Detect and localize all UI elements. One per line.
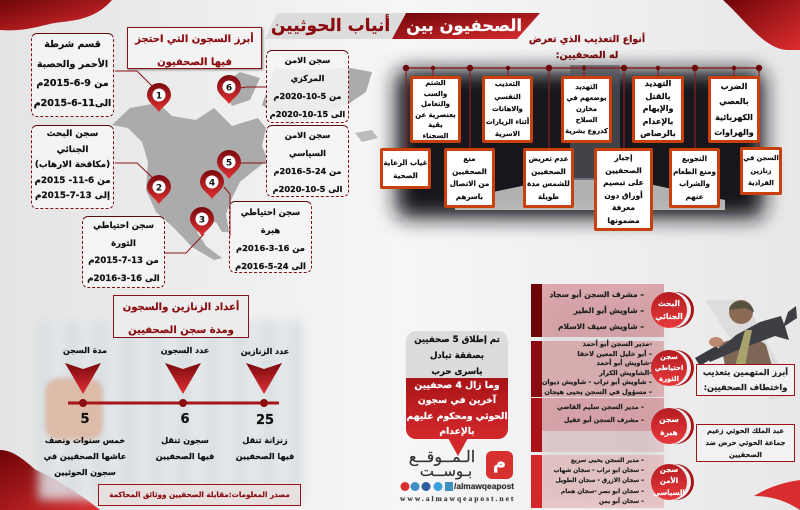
logo [409, 447, 513, 480]
torture: insults: السجناء [423, 132, 448, 140]
torture: death threats: بالإعدام [643, 117, 673, 126]
row: habra reserve [531, 398, 694, 452]
panel: prison 4: من 16-3-2016م [236, 243, 305, 253]
panel: prison 3: من 13-7-2015م [88, 256, 159, 266]
row: habra reserve: سجن [659, 415, 679, 424]
panel: prison 4: هبرة [261, 225, 280, 235]
illustration: armed militant [695, 300, 797, 364]
row: revolution reserve: سجن [660, 352, 678, 360]
label: Houthi leader: جماعة الحوثي حرض ضد [705, 439, 786, 447]
panel: prison 1: الى11-6-2015م [34, 98, 111, 108]
label: Houthi leader: عبد الملك الحوثي زعيم [707, 427, 784, 435]
torture: human shields: التهديد [575, 83, 598, 91]
torture: beating [708, 76, 760, 143]
column: prisons count: 6 [180, 412, 190, 427]
row: revolution reserve: -الشاويش الكرار [599, 369, 652, 377]
hand photo [45, 378, 103, 440]
panel: prison 6: الى 15-10-2020م [270, 109, 345, 119]
torture: solitary cells: زنازين [751, 167, 771, 175]
row: criminal investigation: الجنائي [655, 312, 683, 321]
torture: insults: الشتم [425, 79, 446, 87]
row: revolution reserve: – أبو خليل المعين لاحقا [577, 350, 652, 358]
torture: death threats: بالقتل [645, 92, 671, 101]
label: Houthi leader [696, 424, 795, 462]
row: criminal investigation: – مشرف السجن أبو سجاد [549, 290, 644, 299]
torture: forced signing: على تبصيم [603, 178, 644, 187]
torture: starvation: التجويع [682, 154, 707, 163]
row: political security: الأمن [660, 477, 678, 485]
callout: released journalists [406, 331, 508, 456]
panel: prison 4 [229, 201, 312, 273]
row: political security: سجن [660, 466, 678, 474]
torture: insults: والسب [424, 90, 447, 98]
column: duration: خمس سنوات ونصف [45, 436, 125, 445]
torture panel backdrop and connectors [378, 52, 781, 236]
torture: insults: والتعامل [421, 100, 450, 108]
label: accused names: أبرز المتهمين بتعذيب [703, 367, 788, 377]
panel: prison 1: الأحمر والحصبة [37, 58, 108, 70]
torture: starvation: ومنع الطعام [673, 166, 716, 176]
torture: no sunlight: الصحفيين [531, 166, 566, 176]
torture: forced signing: مضمونها [607, 216, 640, 224]
panel: prison 5: السياسي [289, 148, 326, 158]
torture: psychological: الاسرية [495, 130, 520, 138]
heading: cells and prisons: أعداد الزنازين والسجون [123, 302, 239, 313]
timeline chart [65, 363, 282, 407]
panel: prison 4: الى 24-5-2016م [235, 261, 306, 271]
row: criminal investigation [531, 284, 694, 337]
column: prisons count: سجون تنقل [161, 436, 209, 445]
column: cells count: 25 [256, 413, 274, 428]
row: political security: – سجان الازرق - سجان الطويل [556, 478, 644, 484]
callout: released journalists: الحوثي ومحكوم عليهم [406, 411, 508, 422]
label: accused names [696, 364, 795, 396]
torture: no healthcare [380, 148, 431, 189]
torture: no family contact [444, 148, 495, 208]
source note: مصدر المعلومات:مقابلة الصحفيين ووثائق المحاكمة [109, 490, 290, 499]
heading: cells and prisons [113, 295, 249, 338]
panel: prison 2: إلى 13-7-2015م [35, 191, 110, 201]
map pins and connectors: 4 [209, 178, 215, 188]
panel: prison 1: من 9-6-2015م [36, 78, 109, 89]
source note [98, 484, 301, 506]
torture: insults: بعنصرية عن [415, 110, 456, 118]
torture: insults [410, 76, 461, 143]
column: prisons count: فيها الصحفيين [156, 452, 214, 461]
torture: no sunlight: للشمس مدة [527, 179, 570, 188]
bars photo background [38, 320, 303, 500]
torture: human shields: السلاح [576, 116, 597, 124]
torture: forced signing: إجبار [614, 153, 633, 162]
torture: psychological: أثناء الزيارات [486, 118, 529, 126]
torture: psychological: النفسي [494, 93, 521, 101]
column: duration: عاشها الصحفيين في [44, 452, 126, 461]
panel: prison 5: من 24-5-2016م [273, 166, 342, 176]
label: Houthi leader: الصحفيين [729, 451, 762, 459]
panel: prison 6: سجن الامن [285, 55, 330, 65]
column: cells count: زنزانة تنقل [242, 436, 288, 445]
panel: prison 6: من 5-10-2020م [273, 91, 342, 101]
heading: main prisons: فيها الصحفيون [157, 57, 232, 68]
row: revolution reserve: -مدير السجن أبو أحمد [583, 340, 652, 348]
panel: prison 3: الثورة [111, 239, 136, 249]
torture: death threats: التهديد [645, 79, 671, 88]
row: political security: – سجان ابو نصر -سجان همام [561, 489, 644, 495]
panel: prison 5: الى 5-10-2020م [273, 184, 342, 194]
column: duration: مدة السجن [63, 346, 107, 355]
column: prisons count: عدد السجون [161, 346, 209, 355]
heading: torture types: له الصحفيين: [556, 50, 618, 61]
torture: forced signing: معرفة [612, 203, 635, 212]
torture: no healthcare: غياب الرعاية [384, 158, 428, 166]
torture: no sunlight: طويلة [538, 192, 559, 200]
map pins and connectors: 5 [226, 158, 232, 168]
row: revolution reserve: الثورة [659, 374, 679, 382]
row: revolution reserve: احتياطي [655, 364, 683, 372]
website: www.almawqeapost.net [400, 494, 515, 503]
panel: prison 2: (مكافحة الارهاب) [35, 160, 110, 170]
social icons and handle [400, 481, 514, 491]
callout: released journalists: وما زال 4 صحفيين [414, 380, 500, 391]
torture: human shields: بوضعهم في [566, 94, 607, 102]
torture: death threats: بالرصاص [640, 129, 676, 138]
callout: released journalists: آخرين في سجون [418, 395, 496, 406]
torture: beating: الكهربائية [715, 112, 753, 122]
callout: released journalists: تم إطلاق 5 صحفيين [414, 335, 500, 345]
torture: no family contact: منع [463, 154, 476, 163]
panel: prison 5 [266, 125, 349, 197]
panel: prison 3 [82, 216, 165, 288]
torture: starvation [669, 148, 720, 208]
panel: prison 6: المركزي [291, 73, 324, 83]
title banner: أنياب الحوثيين [271, 16, 390, 36]
row: political security: السياسي [653, 489, 685, 497]
torture: death threats: والإيهام [643, 104, 673, 113]
torture: solitary cells: الفرادية [748, 179, 774, 187]
panel: prison 5: سجن الامن [285, 130, 330, 140]
row: revolution reserve: -شاويش أبو أحمد [596, 359, 652, 367]
social icons and handle: /almawqeapost [454, 481, 514, 491]
torture: psychological: والاهانات [492, 105, 523, 113]
panel: prison 1 [31, 33, 114, 117]
column: cells count [236, 347, 294, 462]
logo: بـوســت [420, 462, 472, 480]
row: revolution reserve: – شاويش أبو تراب - شاويش ديوان [542, 378, 652, 386]
heading: main prisons [127, 27, 262, 69]
column: prisons count [156, 346, 214, 462]
row: political security: – سجان أبو يمن [599, 499, 644, 505]
column: cells count: عدد الزنازين [241, 347, 289, 356]
panel: prison 1: قسم شرطة [44, 39, 101, 50]
torture: solitary cells: السجن في [743, 154, 779, 162]
panel: prison 2: سجن البحث [47, 129, 98, 139]
callout: released journalists: باسرى حرب [431, 367, 483, 377]
panel: prison 2: الجنائي [57, 144, 88, 154]
row: political security: – مدير السجن يحيى سريع [571, 458, 644, 464]
column: duration: 5 [80, 412, 90, 427]
callout: released journalists: بصفقة تبادل [430, 351, 484, 361]
row: habra reserve: – مشرف السجن أبو عقيل [564, 417, 644, 424]
torture: death threats [632, 76, 684, 143]
label: accused names: واختطاف الصحفيين: [704, 382, 787, 392]
title banner: الصحفيون بين [406, 16, 522, 35]
map pins and connectors: 1 [156, 92, 162, 102]
torture: no sunlight [523, 148, 574, 208]
heading: cells and prisons: ومدة سجن الصحفيين [128, 325, 234, 336]
row: criminal investigation: – شاويش سيف الاسلام [558, 322, 644, 331]
torture: human shields: كدروع بشرية [565, 127, 608, 135]
map pins and connectors: 6 [226, 84, 232, 94]
heading: torture types [529, 32, 645, 61]
torture: human shields [561, 76, 612, 143]
heading: torture types: أنواع التعذيب الذي تعرض [529, 34, 645, 45]
row: criminal investigation: – شاويش أبو الطير [574, 306, 644, 315]
title banner [265, 13, 540, 39]
torture: beating: بالعصي [719, 97, 749, 106]
panel: prison 2: من 6-11- 2015م [34, 176, 111, 186]
torture: no family contact: من الاتصال [450, 179, 489, 188]
torture: no healthcare: الصحية [393, 170, 418, 180]
torture: psychological: التعذيب [495, 80, 520, 88]
accused list backdrop [540, 300, 660, 500]
map pins and connectors: 3 [199, 216, 205, 226]
panel: prison 6 [266, 50, 349, 123]
panel: prison 2 [31, 125, 114, 209]
torture: forced signing [594, 148, 653, 231]
torture: forced signing: الصحفيين [605, 166, 642, 174]
panel: prison 3: سجن احتياطي [93, 221, 154, 231]
map pins and connectors: 2 [156, 184, 162, 194]
row: revolution reserve: – مسؤول في السجن يحيى هيجان [544, 388, 652, 396]
torture: solitary cells [740, 147, 782, 195]
row: revolution reserve [531, 340, 694, 397]
callout: released journalists: بالإعدام [439, 426, 475, 437]
panel: prison 3: الى 16-3-2016م [87, 274, 160, 284]
torture: no sunlight: عدم تعريض [528, 154, 569, 163]
torture: insults: بقية [428, 121, 443, 129]
torture: no family contact: الصحفيين [452, 166, 487, 176]
row: political security [531, 455, 694, 508]
row: criminal investigation: البحث [658, 299, 680, 308]
torture: starvation: عنهم [686, 192, 704, 200]
torture: no family contact: باسرهم [456, 192, 483, 200]
logo: م [493, 452, 506, 473]
row: habra reserve: – مدير السجن سليم القاضي [557, 404, 644, 411]
row: political security: – سجان ابو تراب - سجان شهاب [554, 468, 644, 474]
row: habra reserve: هبرة [660, 428, 678, 437]
torture: beating: والهراوات [714, 128, 754, 137]
column: duration [44, 346, 126, 478]
panel: prison 4: سجن احتياطي [241, 207, 300, 217]
torture: psychological [482, 76, 533, 143]
logo: الـمــوقــع [409, 447, 475, 466]
column: cells count: فيها الصحفيين [236, 452, 294, 461]
torture: starvation: والشراب [679, 179, 710, 188]
torture: forced signing: أوراق دون [604, 190, 643, 200]
torture: human shields: مخازن [576, 105, 597, 113]
torture: beating: الضرب [721, 82, 747, 90]
column: duration: سجون الحوثيين [54, 468, 116, 477]
heading: main prisons: أبرز السجون التي احتجز [135, 34, 254, 45]
